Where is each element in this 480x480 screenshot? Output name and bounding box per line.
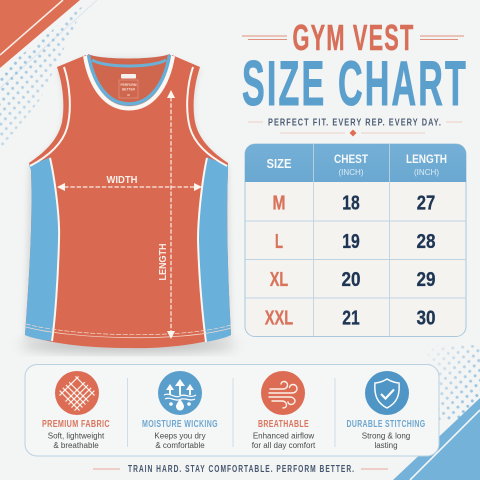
header labels: SIZE	[266, 157, 292, 171]
length label: LENGTH	[157, 244, 169, 280]
description: Enhanced airflow	[253, 432, 314, 440]
grid	[245, 144, 466, 336]
header labels	[266, 152, 447, 171]
heading: DURABLE STITCHING	[346, 419, 426, 430]
title rules	[242, 36, 464, 40]
feature: breathable	[252, 371, 316, 450]
length values: 30	[416, 308, 436, 330]
icon: fabric weave	[55, 371, 99, 415]
neck label: PERFORM	[121, 83, 137, 87]
vest body	[25, 55, 231, 348]
width arrow	[57, 183, 202, 191]
panel frame	[25, 364, 439, 456]
chest values	[342, 192, 360, 330]
chest values: 20	[342, 269, 360, 291]
feature: durable stitching	[346, 371, 426, 450]
diamond ornament	[350, 130, 356, 136]
decorative corner: top left	[0, 0, 97, 146]
features panel	[25, 357, 439, 456]
size labels	[265, 192, 293, 330]
header labels: CHEST	[334, 152, 369, 166]
length arrow	[167, 90, 175, 339]
feature: moisture wicking	[142, 371, 218, 450]
armhole piping	[30, 67, 227, 166]
feature: premium fabric	[42, 371, 110, 448]
footer tagline: TRAIN HARD. STAY COMFORTABLE. PERFORM BETTER.	[128, 464, 355, 475]
left side panel	[25, 157, 59, 341]
heading: BREATHABLE	[258, 419, 309, 430]
heading: PREMIUM FABRIC	[42, 419, 110, 430]
size labels: L	[275, 231, 283, 253]
description: Soft, lightweight	[48, 432, 105, 440]
neck label	[119, 74, 138, 98]
description: Strong & long	[362, 432, 410, 440]
header units	[338, 168, 439, 177]
neck label: M	[127, 93, 130, 97]
heading: MOISTURE WICKING	[142, 419, 218, 430]
right side panel	[198, 157, 231, 342]
description: & comfortable	[155, 441, 205, 450]
panel dividers	[128, 378, 335, 447]
header labels: LENGTH	[406, 152, 447, 166]
header units: (INCH)	[338, 168, 364, 177]
description: lasting	[374, 441, 398, 450]
panel piping	[50, 158, 207, 342]
icon: wind	[261, 371, 305, 415]
size labels: XXL	[265, 308, 293, 330]
gym vest illustration	[20, 54, 236, 352]
length values: 28	[416, 231, 436, 253]
chest values: 21	[342, 308, 360, 330]
front collar trim	[85, 55, 173, 108]
vest shadow	[20, 58, 236, 352]
size table	[245, 144, 466, 336]
size labels: M	[272, 192, 286, 214]
description: & breathable	[53, 441, 99, 450]
width label: WIDTH	[106, 174, 138, 186]
decorative corner: bottom right	[393, 345, 480, 480]
neck label: BETTER	[122, 88, 136, 92]
table body	[245, 144, 466, 336]
description: for all day comfort	[252, 441, 316, 450]
back collar band	[92, 60, 166, 66]
description: Keeps you dry	[154, 432, 206, 440]
icon: shield	[365, 371, 409, 415]
title block	[242, 17, 468, 136]
length values: 27	[417, 192, 435, 214]
length values: 29	[416, 269, 436, 291]
length values	[416, 192, 436, 330]
table header	[245, 144, 466, 182]
icon: moisture arrows	[158, 371, 202, 415]
size labels: XL	[270, 269, 288, 291]
hem stitching	[26, 324, 231, 338]
chest values: 19	[342, 231, 360, 253]
vest back neck interior	[88, 54, 170, 106]
header units: (INCH)	[414, 168, 439, 177]
subtitle rules	[248, 122, 462, 133]
chest values: 18	[342, 192, 360, 214]
